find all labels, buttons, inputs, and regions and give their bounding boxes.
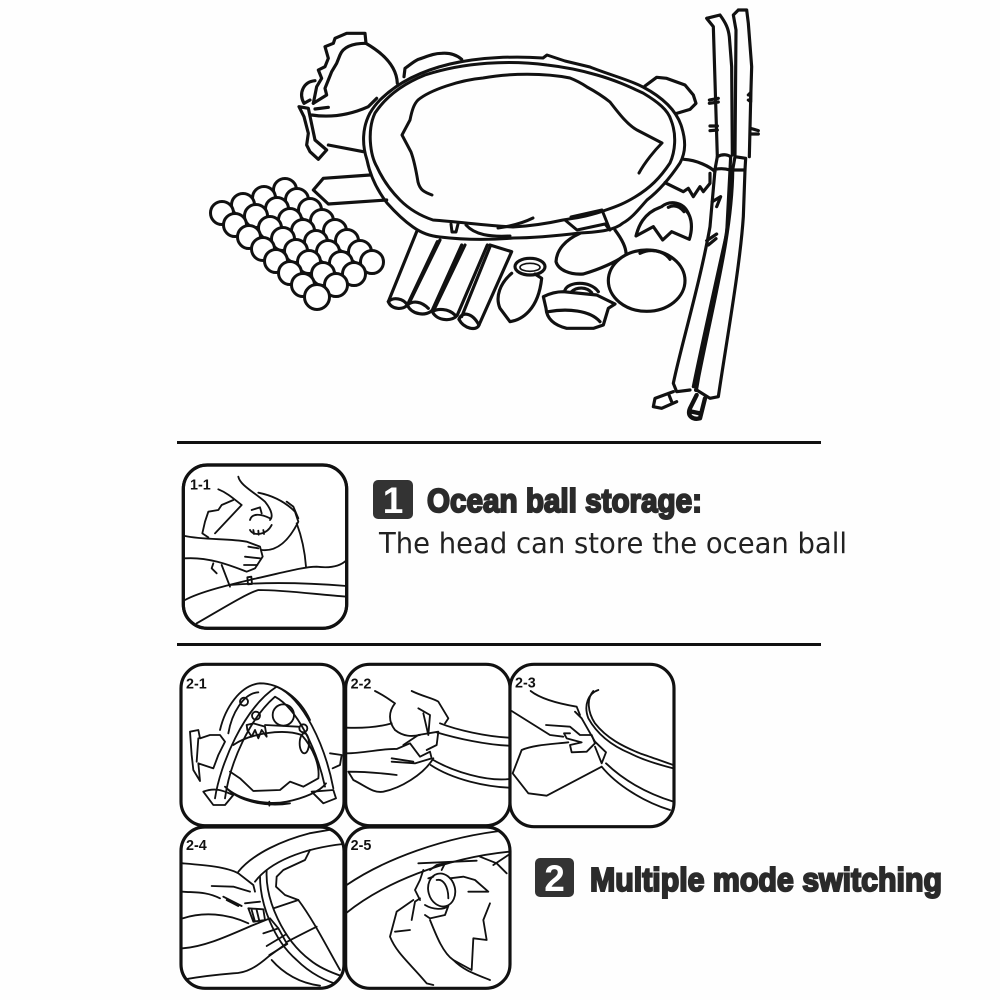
icon: support poles bbox=[653, 10, 758, 419]
icon: large ball toy bbox=[608, 250, 685, 311]
panel: step 2-3 bbox=[510, 664, 674, 827]
drawing: hands on pole buckle bbox=[183, 828, 343, 986]
icon: seam lines bbox=[498, 218, 533, 228]
label: 2-3: 2-3 bbox=[515, 676, 536, 692]
panel: step 1-1 bbox=[183, 465, 347, 628]
panel: step 2-5 bbox=[346, 827, 510, 988]
divider: top rule bbox=[177, 441, 821, 444]
icon: left toy head bbox=[299, 33, 397, 159]
icon: flap behind ring bbox=[404, 53, 462, 77]
drawing: hands at clip bbox=[347, 691, 509, 792]
drawing: hands on ring clip bbox=[347, 830, 509, 985]
drawing: hand at pole clip bbox=[512, 690, 673, 810]
icon: right toy head bbox=[665, 159, 715, 197]
title: multiple mode switching: Multiple mode switching bbox=[590, 861, 942, 898]
label: 2-1: 2-1 bbox=[186, 676, 207, 692]
panel: step 2-2 bbox=[346, 664, 510, 826]
drawing: hands storing balls in head bbox=[185, 477, 347, 623]
icon: number badge 2 bbox=[535, 858, 574, 899]
icon: number badge 1 bbox=[373, 480, 413, 521]
icon: ocean balls bbox=[210, 178, 384, 310]
label: 2-5: 2-5 bbox=[351, 838, 371, 854]
panel: step 2-4 bbox=[181, 827, 344, 988]
heading: section 2 bbox=[535, 858, 942, 899]
icon: left tab bbox=[313, 175, 387, 204]
label: 2-4: 2-4 bbox=[186, 838, 207, 854]
icon: right flap bbox=[645, 77, 696, 113]
icon: rolled tubes bbox=[388, 232, 512, 329]
icon: leaf toy bbox=[636, 203, 691, 240]
heading: section 1 bbox=[373, 480, 847, 560]
icon: number badge 2: 2 bbox=[544, 858, 565, 899]
label: 1-1: 1-1 bbox=[190, 477, 211, 493]
icon: blob toy bbox=[556, 230, 626, 274]
illustration: main ring mat bbox=[364, 55, 685, 239]
icon: bowl toy bbox=[543, 283, 615, 328]
icon: vase toy bbox=[498, 258, 545, 322]
drawing: assembled gym bbox=[190, 683, 342, 806]
icon: ring outer bbox=[364, 55, 685, 239]
divider: middle rule bbox=[177, 643, 821, 646]
frame: 1-1 bbox=[183, 465, 347, 628]
illustration: product parts right side bbox=[498, 10, 758, 419]
label: 2-2: 2-2 bbox=[351, 676, 371, 692]
icon: number badge 1: 1 bbox=[383, 480, 403, 521]
illustration: product parts left side bbox=[299, 33, 512, 329]
text: description: The head can store the ocean ball bbox=[378, 527, 847, 560]
icon: buckle strap bbox=[451, 210, 610, 236]
icon: ring inner bbox=[370, 62, 675, 227]
panel: step 2-1 bbox=[181, 664, 344, 826]
icon: fabric centre bbox=[402, 74, 662, 195]
title: ocean ball storage: Ocean ball storage: bbox=[427, 482, 702, 519]
